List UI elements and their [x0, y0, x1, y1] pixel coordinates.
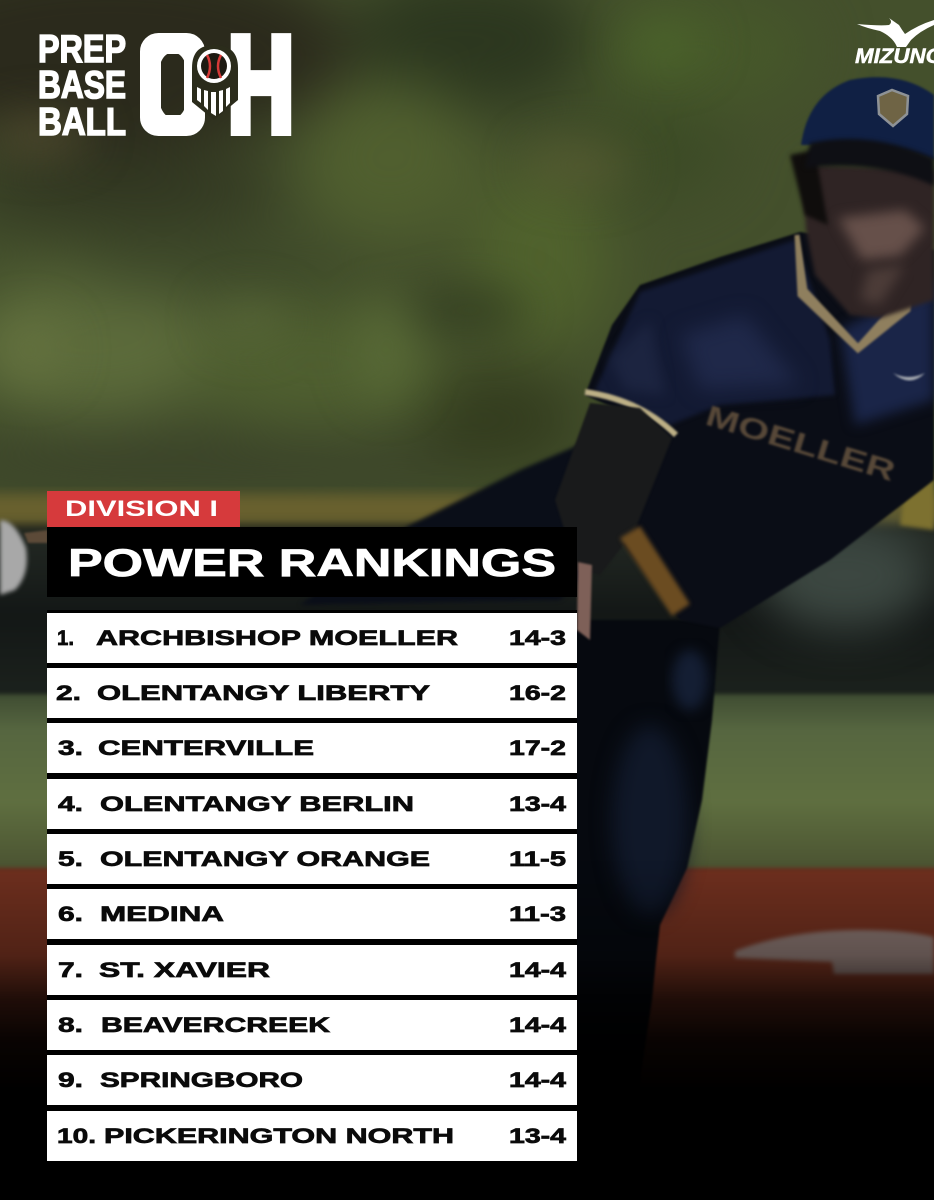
rank 4 row	[47, 779, 577, 829]
rank 10 row: 10.	[57, 1125, 96, 1148]
rank 3 row: 17-2	[509, 737, 566, 760]
sleeve trim	[585, 392, 676, 435]
rank 3 row: CENTERVILLE	[98, 737, 314, 760]
rankings table	[47, 610, 577, 1162]
rank 3 row: 3.	[58, 737, 83, 760]
player trailing arm	[300, 440, 600, 605]
rank 10 row: 13-4	[509, 1125, 566, 1148]
rank 6 row: 11-3	[509, 903, 566, 926]
rank 1 row: 1.	[57, 627, 74, 650]
logo wordmark: BALL	[38, 101, 126, 144]
rank 9 row: 14-4	[509, 1069, 566, 1092]
heading: power rankings	[47, 527, 577, 597]
rank 9 row: 9.	[58, 1069, 83, 1092]
rank 1 row	[47, 613, 577, 663]
rank 9 row	[47, 1055, 577, 1105]
rank 2 row: OLENTANGY LIBERTY	[97, 682, 430, 705]
logo state letters: O	[143, 9, 203, 161]
rank 7 row: ST. XAVIER	[99, 959, 270, 982]
rank 6 row	[47, 889, 577, 939]
logo wordmark	[38, 28, 126, 144]
rank 5 row: 5.	[58, 848, 83, 871]
jersey lettering: MOELLER	[702, 400, 899, 488]
rank 10 row	[47, 1111, 577, 1161]
rank 7 row: 14-4	[509, 959, 566, 982]
rank 6 row: 6.	[58, 903, 83, 926]
rank 10 row: PICKERINGTON NORTH	[104, 1125, 454, 1148]
player cap	[801, 77, 934, 160]
rank 2 row: 2.	[56, 682, 81, 705]
player neck and face	[802, 165, 934, 318]
rank 5 row	[47, 834, 577, 884]
logo: Mizuno	[855, 18, 934, 68]
rank 4 row: 4.	[58, 793, 83, 816]
waist stripe	[620, 526, 690, 616]
heading: power rankings: POWER RANKINGS	[68, 542, 556, 585]
rank 6 row: MEDINA	[100, 903, 224, 926]
rank 8 row: BEAVERCREEK	[101, 1014, 330, 1037]
rank 7 row	[47, 945, 577, 995]
rank 2 row: 16-2	[509, 682, 566, 705]
rank 8 row: 8.	[58, 1014, 83, 1037]
rank 4 row: 13-4	[509, 793, 566, 816]
logo wordmark: BASE	[38, 64, 126, 107]
icon: baseball shield	[192, 45, 238, 120]
background: bottom dark gradient	[0, 860, 934, 1200]
player legs	[560, 620, 720, 1200]
icon: runbird	[857, 18, 934, 47]
rank 3 row	[47, 723, 577, 773]
jersey collar	[797, 235, 912, 350]
rank 2 row	[47, 668, 577, 718]
logo: Prep Baseball Ohio	[38, 9, 294, 161]
rank 1 row: 14-3	[509, 627, 566, 650]
rank 1 row: ARCHBISHOP MOELLER	[96, 627, 458, 650]
background: infield grass	[0, 694, 934, 872]
logo state letters: H	[228, 9, 294, 160]
tag: division: DIVISION I	[65, 496, 218, 521]
rank 9 row: SPRINGBORO	[100, 1069, 303, 1092]
rank 8 row	[47, 1000, 577, 1050]
tag: division	[47, 491, 240, 527]
rank 4 row: OLENTANGY BERLIN	[100, 793, 414, 816]
rank 7 row: 7.	[58, 959, 83, 982]
jersey logo swoosh	[893, 373, 925, 380]
rank 5 row: 11-5	[509, 848, 566, 871]
player jersey	[585, 232, 934, 628]
rank 8 row: 14-4	[509, 1014, 566, 1037]
logo wordmark: PREP	[38, 28, 126, 71]
rank 5 row: OLENTANGY ORANGE	[100, 848, 430, 871]
cap badge	[878, 90, 908, 126]
background: blurred trees	[0, 0, 934, 520]
gripping hand	[577, 562, 592, 640]
background: infield clay and mound	[0, 868, 934, 1108]
player forearm sleeve	[555, 403, 672, 575]
trailing hand	[0, 520, 27, 595]
background: outfield fence band	[0, 470, 934, 702]
